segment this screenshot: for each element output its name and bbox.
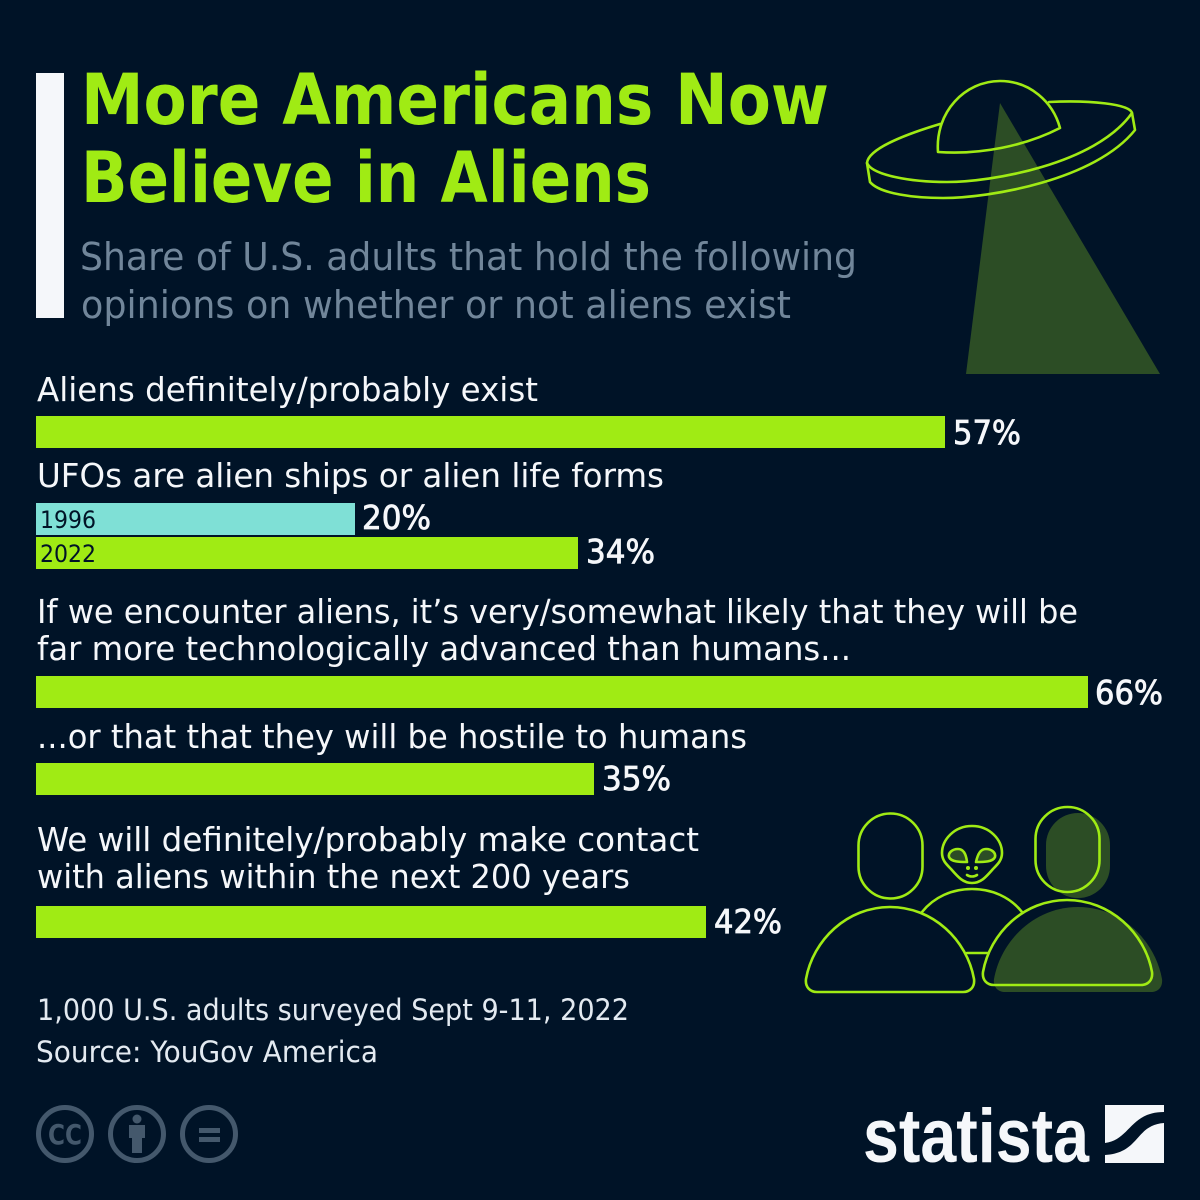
row: hostile to humans: ...or that that they will be hostile to humans [37,717,747,756]
row: aliens exist [36,370,1021,452]
icon: creative commons licence [38,1108,236,1160]
title: Believe in Aliens [81,137,651,219]
icon: creative commons licence: CC [48,1118,82,1151]
row: hostile to humans [36,717,747,798]
footnote [36,993,629,1069]
row: make contact: with aliens within the next 200 years [37,857,630,896]
row: technologically advanced: 66% [1095,673,1163,712]
row: UFOs are alien ships: 20% [362,498,431,537]
row: make contact: We will definitely/probably make contact [37,820,699,859]
icon: humans and alien [806,807,1162,992]
title [81,59,829,219]
title: More Americans Now [81,59,829,141]
subtitle: Share of U.S. adults that hold the following [80,235,857,279]
subtitle: opinions on whether or not aliens exist [81,283,791,327]
row: hostile to humans: 35% [602,759,671,798]
row: aliens exist: Aliens definitely/probably exist [37,370,538,409]
row: UFOs are alien ships [36,456,664,571]
row: UFOs are alien ships: 34% [586,532,655,571]
row: technologically advanced [36,592,1163,712]
subtitle [80,235,857,327]
row: make contact [36,820,782,941]
row: UFOs are alien ships: UFOs are alien ships or alien life forms [37,456,664,495]
footnote: 1,000 U.S. adults surveyed Sept 9-11, 2022 [37,993,629,1027]
row: UFOs are alien ships: 2022 [40,540,96,568]
row: make contact: 42% [714,902,782,941]
row: technologically advanced: If we encounter aliens, it’s very/somewhat likely that they will be [37,592,1078,631]
row: technologically advanced: far more technologically advanced than humans... [37,629,851,668]
footnote: Source: YouGov America [36,1035,378,1069]
row: UFOs are alien ships: 1996 [40,506,96,534]
logo: statista: statista [863,1094,1090,1179]
accent bar [36,73,64,318]
row: aliens exist: 57% [953,413,1021,452]
icon: UFO with beam [867,81,1160,374]
